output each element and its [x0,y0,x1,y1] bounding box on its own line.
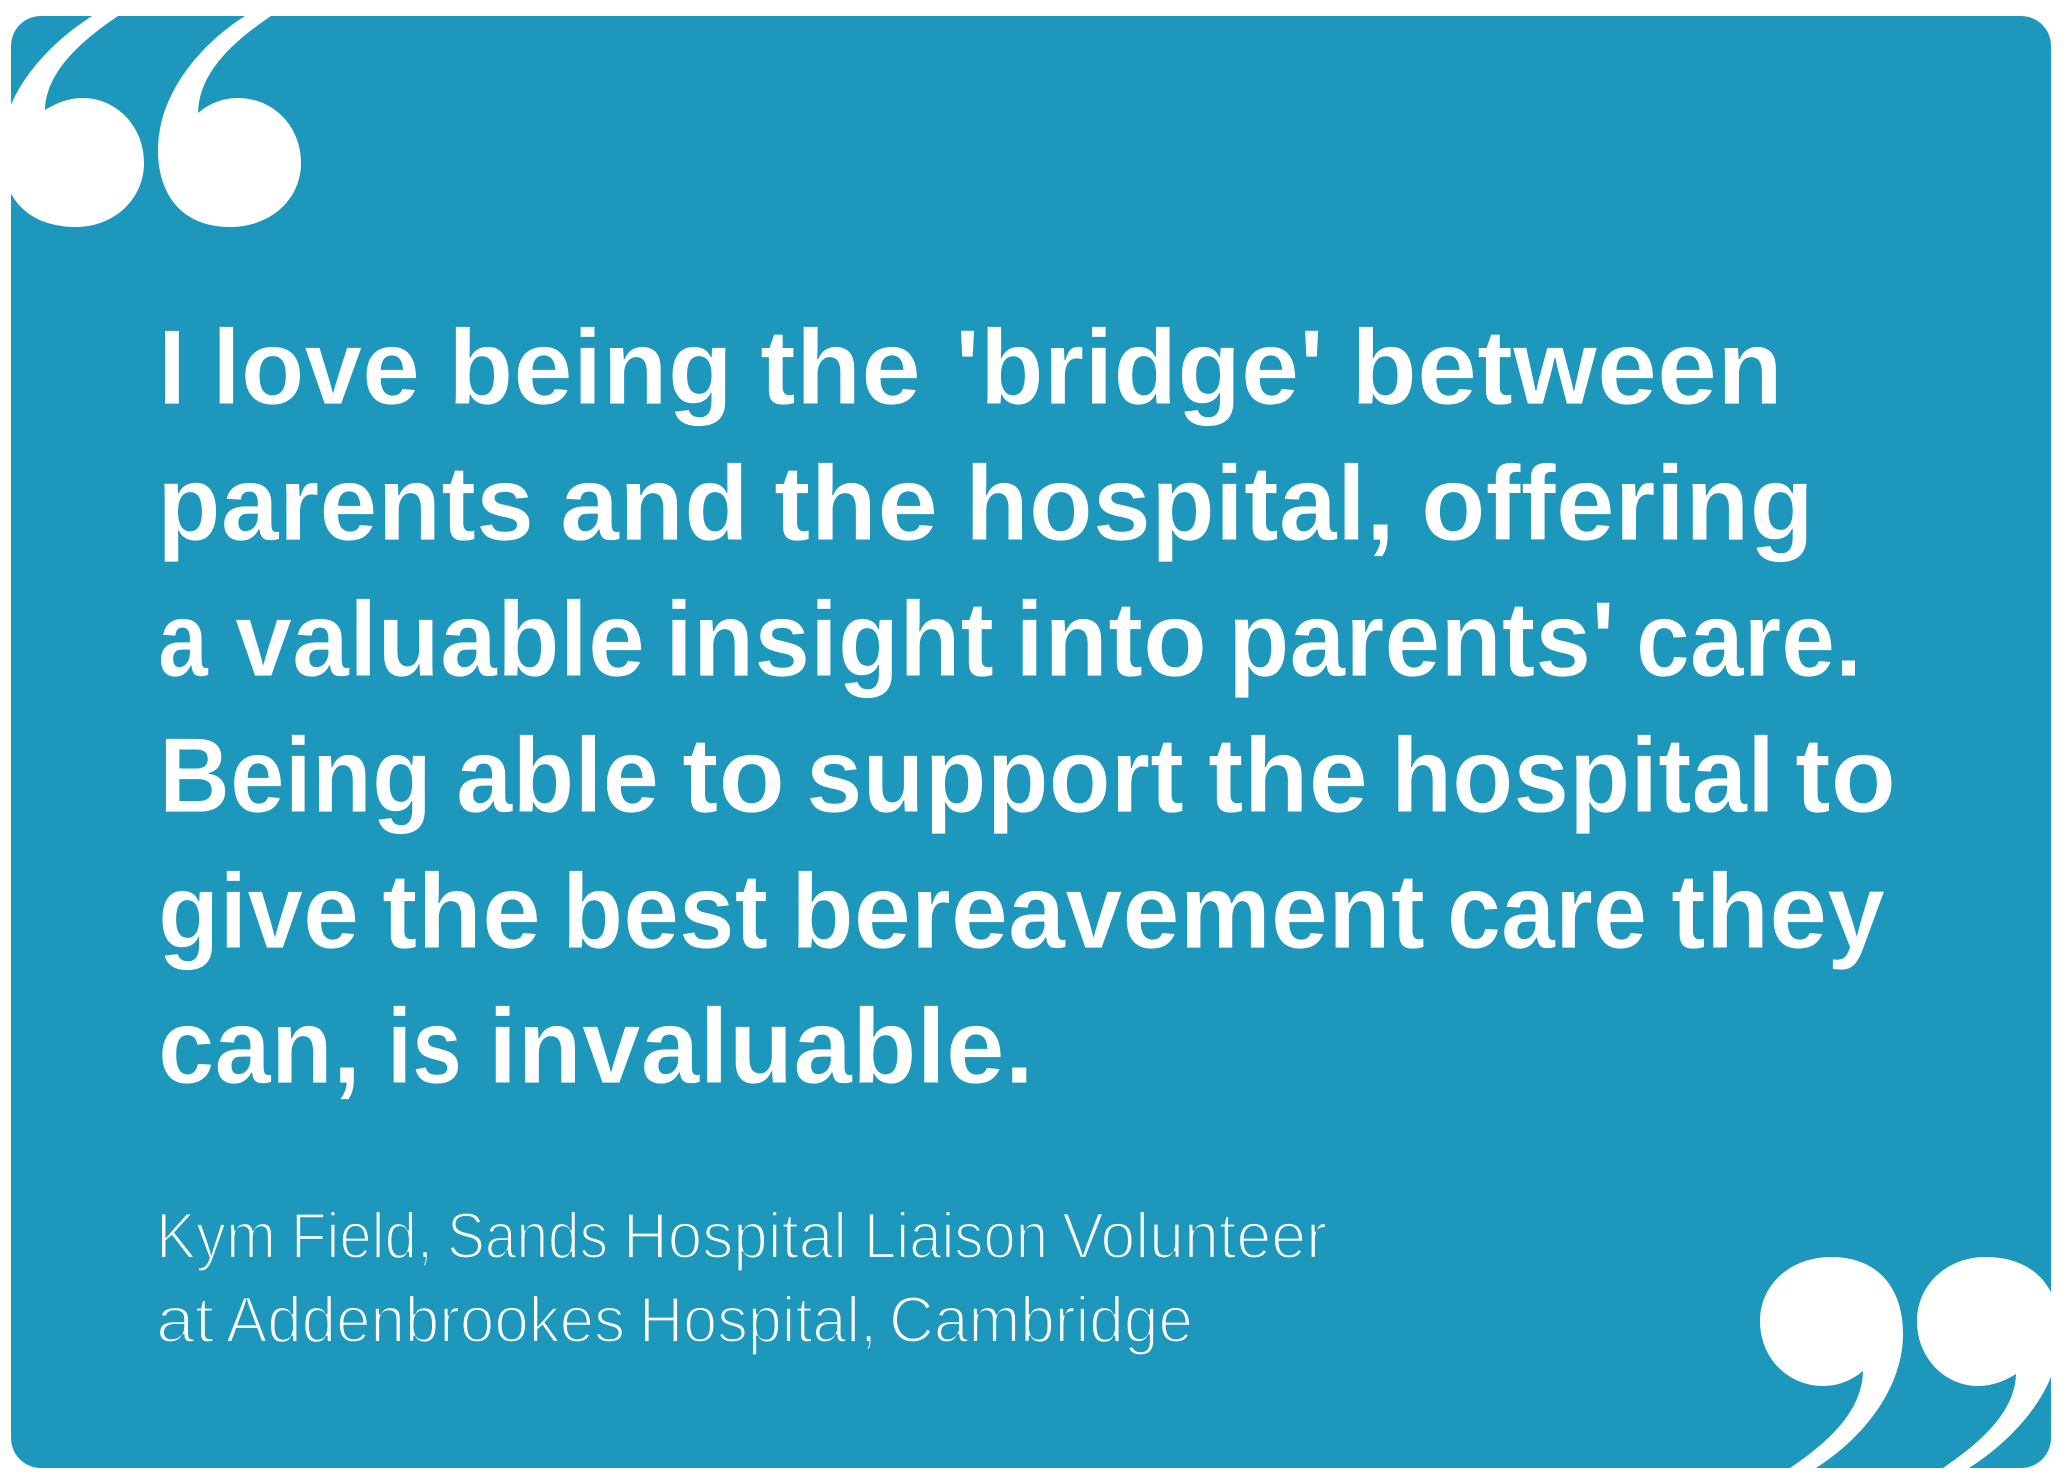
quote text: offering [1421,443,1814,563]
quote text: the [382,851,541,971]
attribution text: Addenbrookes [226,1283,625,1356]
quote text: they [1671,851,1885,971]
attribution text: Hospital [623,1199,847,1272]
quote text: the [760,307,921,427]
quote text: the [1208,715,1368,835]
attribution text: Field, [291,1199,433,1272]
quote text: parents' [1228,579,1615,699]
quote text: hospital, [965,443,1395,563]
quote text: love [212,307,420,427]
icon: closing quotation marks [1760,1257,2060,1468]
quote text: and [560,443,749,563]
attribution text: Sands [447,1199,608,1272]
quote text: Being [159,715,432,835]
attribution text: Kym [156,1199,276,1272]
quote text: give [158,851,359,971]
quote text: into [1015,579,1207,699]
quote text: can, [158,986,361,1106]
quote text: parents [157,443,534,563]
quote text: care. [1636,579,1862,699]
quote text: best [562,851,768,971]
quote text [157,307,1896,1106]
attribution text: Volunteer [1062,1199,1327,1272]
attribution text: Liaison [864,1199,1048,1272]
quote text: a [158,579,209,699]
attribution text: at [156,1283,214,1356]
quote text: bereavement [791,851,1425,971]
icon: opening quotation marks [1,16,301,227]
attribution text: Cambridge [889,1283,1193,1356]
quote text: to [682,715,785,835]
quote text: support [806,715,1184,835]
quote text: between [1351,307,1783,427]
quote text: invaluable. [488,986,1034,1106]
quote text: is [387,986,462,1106]
quote text: care [1447,851,1647,971]
attribution text [156,1199,1327,1356]
attribution text: Hospital, [639,1283,877,1356]
quote text: able [456,715,659,835]
quote text: being [448,307,733,427]
quote text: 'bridge' [955,307,1324,427]
quote text: hospital [1391,715,1775,835]
quote text: insight [665,579,994,699]
quote text: the [774,443,938,563]
quote text: to [1795,715,1896,835]
quote text: valuable [235,579,645,699]
quote text: I [158,307,186,427]
